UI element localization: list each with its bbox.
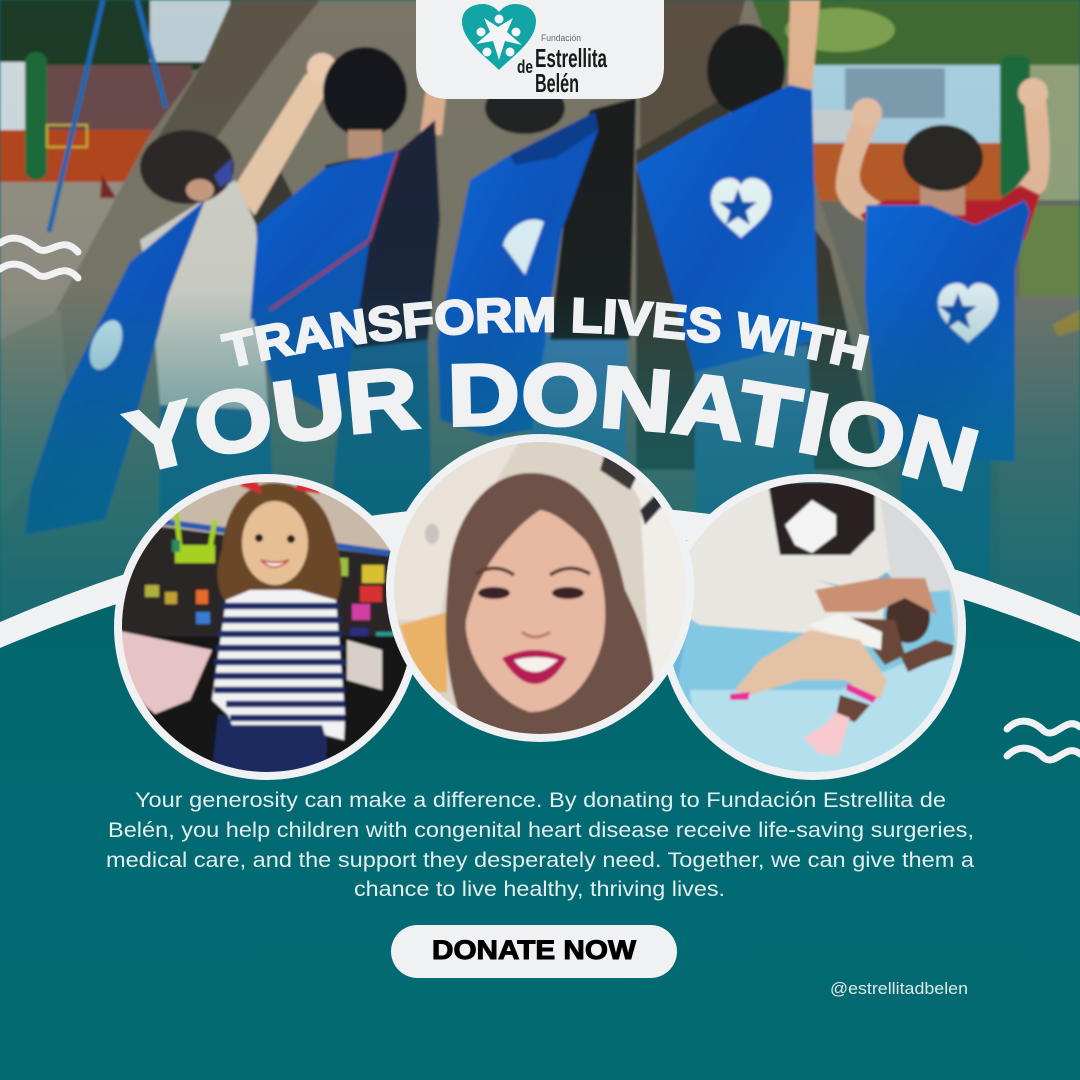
kid 2 [420, 72, 448, 135]
photo circle: baby examined by doctor [660, 470, 970, 790]
logo wordmark: Fundación [541, 33, 581, 43]
donation message paragraph: chance to live healthy, thriving lives. [354, 877, 725, 901]
logo wordmark: de [517, 57, 533, 77]
kid 3 [550, 98, 636, 340]
hair [446, 473, 654, 745]
jeans [158, 400, 272, 560]
decorative wave right [1007, 721, 1080, 760]
decorative wave left [0, 238, 78, 278]
hair [217, 483, 342, 612]
donation message paragraph [106, 788, 974, 901]
logo wordmark [517, 33, 607, 98]
donation message paragraph: Your generosity can make a difference. By donating to Fundación Estrellita de [135, 788, 946, 812]
donate now button: DONATE NOW [432, 935, 637, 965]
photo circle: smiling girl in striped shirt [114, 474, 412, 780]
title arc line 1: TRANSFORM LIVES WITH [220, 296, 870, 371]
background photo: children in blue capes [0, 0, 1080, 640]
photo circle: smiling girl selfie [385, 430, 700, 750]
social handle: @estrellitadbelen [830, 980, 968, 998]
kid 4 [788, 0, 820, 92]
logo wordmark: Belén [535, 68, 579, 98]
donation message paragraph: Belén, you help children with congenital heart disease receive life-saving surgeries, [108, 818, 974, 842]
donate now button [391, 925, 677, 978]
teal lower panel [0, 532, 1080, 1080]
white arc band [0, 503, 1080, 660]
logo wordmark: Estrellita [535, 43, 607, 73]
donation message paragraph: medical care, and the support they desperately need. Together, we can give them a [106, 848, 974, 872]
kid 5 [836, 105, 885, 222]
title arc line 2: YOUR DONATION [120, 362, 979, 492]
striped shirt [212, 590, 345, 740]
logo plate [416, 0, 664, 99]
logo heart [462, 4, 536, 70]
kid 1 [232, 62, 332, 215]
